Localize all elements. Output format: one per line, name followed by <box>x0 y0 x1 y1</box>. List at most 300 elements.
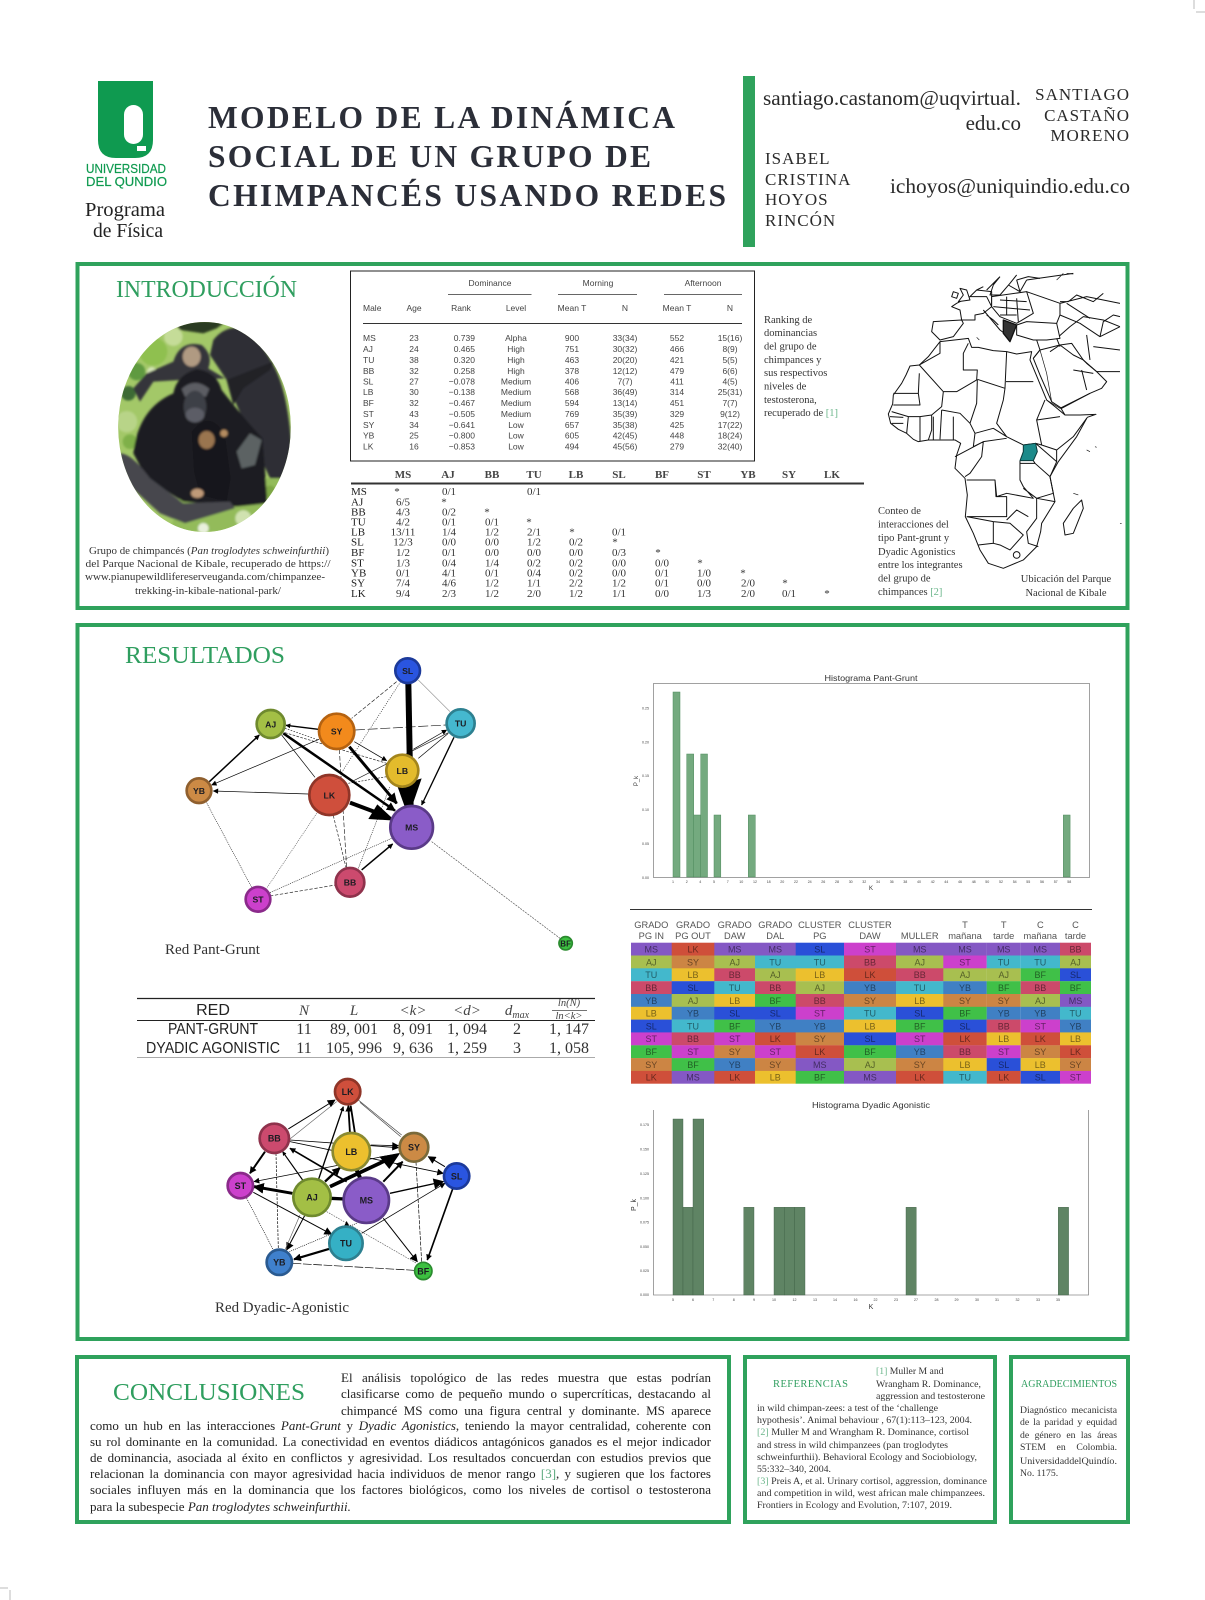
authors and emails: ichoyos@uniquindio.edu.co <box>890 174 1130 198</box>
table: ranking de dominancia y testosterona: 8(9) <box>722 344 738 354</box>
chart: histograma dyadic agonistic: 28 <box>934 1298 938 1302</box>
table: conteo de interacciones: 1/2 <box>396 547 410 559</box>
table: ranking de dominancia y testosterona: 425 <box>670 420 684 430</box>
map note: conteo de interacciones: del grupo de <box>878 574 931 584</box>
table: conteo de interacciones: 1/4 <box>442 526 457 538</box>
table: conteo de interacciones: 0/0 <box>612 568 627 580</box>
table: ranking de dominancia y testosterona: High <box>507 355 525 365</box>
column: T tarde: ST <box>998 1047 1010 1057</box>
column: T tarde: LK <box>998 1073 1009 1083</box>
table: ranking de dominancia y testosterona: 36(49) <box>613 387 637 397</box>
table: conteo de interacciones: 1/2 <box>485 526 499 538</box>
table note: ranking: dominancias <box>764 328 817 339</box>
chart: histograma dyadic agonistic: 16 <box>854 1298 858 1302</box>
network: red dyadic-agonistic: LB <box>345 1147 358 1157</box>
table: ranking de dominancia y testosterona: SL <box>363 376 374 386</box>
table: métricas de red: 89, 001 <box>330 1021 378 1038</box>
table: ranking de dominancia y testosterona: Age <box>406 303 422 313</box>
table: conteo de interacciones: * <box>569 526 575 538</box>
column: T tarde: SL <box>998 1060 1009 1070</box>
column: T mañana: YB <box>959 983 971 993</box>
column: grado PG in: LB <box>646 1009 657 1019</box>
table: ranking de dominancia y testosterona: 30 <box>409 387 419 397</box>
chart: histograma dyadic agonistic: 22 <box>874 1298 878 1302</box>
table header <box>634 920 1086 941</box>
table: conteo de interacciones: 4/2 <box>396 516 410 528</box>
table: conteo de interacciones: MS <box>351 486 367 498</box>
column: C tarde: BF <box>1070 983 1082 993</box>
text: referencias: [3] Preis A, et al. Urinary cortisol, aggression, dominance <box>757 1476 987 1487</box>
table: conteo de interacciones: BB <box>351 506 366 518</box>
column: T tarde: MS <box>997 944 1010 954</box>
column: cluster DAW <box>844 943 896 1084</box>
title <box>208 100 726 213</box>
table: conteo de interacciones: 1/2 <box>612 578 626 590</box>
table: ranking de dominancia y testosterona: 769 <box>565 409 579 419</box>
chart: histograma pant-grunt: 26 <box>821 880 825 884</box>
column: cluster DAW: LB <box>864 1021 876 1031</box>
chart: histograma dyadic agonistic: 9 <box>753 1298 755 1302</box>
column: grado DAL: TU <box>769 957 781 967</box>
table note: ranking: del grupo de <box>764 342 817 352</box>
column: Muller: LB <box>914 996 925 1006</box>
network: red pant-grunt: ST <box>252 895 264 905</box>
table: conteo de interacciones: 0/0 <box>697 578 712 590</box>
table: conteo de interacciones: 2/1 <box>527 526 541 538</box>
table: conteo de interacciones: 1/2 <box>485 578 499 590</box>
chart: histograma pant-grunt: 0.10 <box>642 808 649 812</box>
table: ranking de dominancia y testosterona: 24 <box>409 344 419 354</box>
table: ranking de dominancia y testosterona: 16 <box>409 442 419 452</box>
table: conteo de interacciones: 2/3 <box>442 588 457 600</box>
table: ranking de dominancia y testosterona: −0.467 <box>449 398 475 408</box>
network: red dyadic-agonistic: YB <box>273 1258 286 1268</box>
table header: DAW <box>859 931 881 941</box>
table: ranking de dominancia y testosterona: 463 <box>565 355 579 365</box>
logo: Universidad del Quindío: UNIVERSIDAD <box>86 162 166 176</box>
table: conteo de interacciones: 1/1 <box>527 578 541 590</box>
table: conteo de interacciones: * <box>394 486 400 498</box>
column: C mañana: YB <box>1034 1009 1046 1019</box>
table: métricas de red: 1, 259 <box>447 1040 487 1057</box>
chart: histograma pant-grunt: 48 <box>972 880 976 884</box>
column: C tarde: SY <box>1069 1060 1082 1070</box>
column: cluster DAW: TU <box>864 1009 876 1019</box>
text: referencias: aggression and testosterone <box>876 1391 985 1402</box>
column: grado DAW: YB <box>729 1060 741 1070</box>
chart: histograma dyadic agonistic: 13 <box>813 1298 817 1302</box>
chart: histograma pant-grunt: 20 <box>780 880 784 884</box>
chart: histograma pant-grunt: 44 <box>944 880 948 884</box>
table: ranking de dominancia y testosterona: 25 <box>409 430 419 440</box>
column: grado DAW: AJ <box>729 957 740 967</box>
logo: Universidad del Quindío: DEL QUNDIO <box>86 175 167 189</box>
chart: histograma dyadic agonistic: 8 <box>733 1298 735 1302</box>
table: métricas de red <box>137 998 595 1058</box>
table header: PG IN <box>639 931 664 941</box>
column: grado DAL: AJ <box>770 970 781 980</box>
column: Muller: SL <box>914 1009 925 1019</box>
table: ranking de dominancia y testosterona: 4(5) <box>722 376 738 386</box>
title: SOCIAL DE UN GRUPO DE <box>208 139 651 174</box>
column: cluster PG: BB <box>814 996 826 1006</box>
network: red pant-grunt: MS <box>405 823 418 833</box>
text: agradecimientos: UniversidaddelQuindío. <box>1020 1456 1117 1467</box>
table: métricas de red: 1, 058 <box>549 1040 589 1057</box>
table: conteo de interacciones: 2/0 <box>741 578 756 590</box>
column: grado PG in: TU <box>645 970 657 980</box>
chart: histograma dyadic agonistic: 0.000 <box>640 1293 649 1297</box>
column: grado PG in: SY <box>645 1060 657 1070</box>
column: cluster DAW: SY <box>864 996 876 1006</box>
table: ranking de dominancia y testosterona: Low <box>508 420 525 430</box>
chart: histograma pant-grunt: 7 <box>727 880 729 884</box>
table: ranking de dominancia y testosterona: Low <box>508 430 525 440</box>
table header: CLUSTER <box>848 920 892 930</box>
column: grado PG out: BB <box>687 1034 699 1044</box>
table header: MULLER <box>901 931 939 941</box>
table: métricas de red: d <box>505 1003 512 1019</box>
chart: histograma dyadic agonistic: 12 <box>792 1298 796 1302</box>
table: conteo de interacciones: 1/2 <box>569 588 583 600</box>
column: T tarde: LB <box>998 1034 1009 1044</box>
column: grado DAW: SY <box>729 1047 741 1057</box>
table: ranking de dominancia y testosterona: LK <box>363 442 374 452</box>
chart: histograma pant-grunt: 2 <box>686 880 688 884</box>
table: conteo de interacciones: AJ <box>441 469 455 481</box>
column: Muller: TU <box>914 983 926 993</box>
chart: histograma pant-grunt: 0.15 <box>642 774 649 778</box>
chart: histograma pant-grunt: Histograma Pant-Grunt <box>824 673 918 683</box>
table: métricas de red: max <box>512 1010 530 1021</box>
table: conteo de interacciones: 2/0 <box>741 588 756 600</box>
table: conteo de interacciones: 0/2 <box>569 558 583 570</box>
table: ranking de dominancia y testosterona: 605 <box>565 430 579 440</box>
table: ranking de dominancia y testosterona: 406 <box>565 376 579 386</box>
column: T mañana: MS <box>958 944 972 954</box>
table: conteo de interacciones: 0/0 <box>612 558 627 570</box>
chart: histograma pant-grunt: 57 <box>1054 880 1058 884</box>
table: ranking de dominancia y testosterona: 421 <box>670 355 684 365</box>
chart: histograma pant-grunt: 56 <box>1040 880 1044 884</box>
column: T mañana: SL <box>959 1021 971 1031</box>
table: métricas de red: ln(N) <box>558 998 581 1009</box>
table note: ranking: recuperado de [1] <box>764 408 838 419</box>
column: cluster PG: LB <box>814 970 825 980</box>
heading: referencias: REFERENCIAS <box>773 1379 848 1390</box>
table header: T <box>1001 920 1007 930</box>
caption: red dyadic-agonistic: Red Dyadic-Agonistic <box>215 1300 349 1316</box>
column: T tarde: YB <box>998 1009 1010 1019</box>
chart: histograma dyadic agonistic: K <box>869 1304 874 1311</box>
chart: histograma dyadic agonistic: 33 <box>1036 1298 1040 1302</box>
chart: histograma pant-grunt: 40 <box>917 880 921 884</box>
table: métricas de red: <d> <box>453 1003 481 1019</box>
column: Muller: BB <box>914 970 926 980</box>
chart: histograma pant-grunt: 1 <box>672 880 674 884</box>
table header: GRADO <box>676 920 710 930</box>
network: red pant-grunt <box>187 658 572 950</box>
column: grado PG in: AJ <box>646 957 657 967</box>
table: ranking de dominancia y testosterona: 32 <box>409 366 419 376</box>
table: ranking de dominancia y testosterona: 900 <box>565 333 579 343</box>
photo: chimpancés <box>116 320 293 534</box>
table: métricas de red: PANT-GRUNT <box>168 1021 258 1038</box>
network: red dyadic-agonistic: LK <box>342 1087 354 1097</box>
table: conteo de interacciones: BF <box>655 469 669 481</box>
map caption: ubicación: Ubicación del Parque <box>1021 574 1112 585</box>
table: conteo de interacciones: 0/1 <box>782 588 796 600</box>
column: cluster PG: YB <box>814 1021 826 1031</box>
column: grado PG out: ST <box>687 1047 699 1057</box>
network: red dyadic-agonistic: TU <box>340 1239 352 1249</box>
column: T mañana: SY <box>959 996 971 1006</box>
table: ranking de dominancia y testosterona: High <box>507 344 525 354</box>
column: cluster DAW: AJ <box>865 1060 875 1070</box>
column: grado PG out <box>672 943 715 1084</box>
map note: conteo de interacciones: tipo Pant-grunt y <box>878 533 950 544</box>
table: ranking de dominancia y testosterona: 42(45) <box>613 430 637 440</box>
table: ranking de dominancia y testosterona: BB <box>363 366 375 376</box>
table: conteo de interacciones: 0/2 <box>569 568 583 580</box>
network: red pant-grunt: SY <box>331 727 343 737</box>
table header: C <box>1072 920 1079 930</box>
column: cluster PG <box>796 943 844 1084</box>
table: conteo de interacciones: * <box>655 547 661 559</box>
table: conteo de interacciones: 1/0 <box>697 568 712 580</box>
column: Muller: SY <box>914 1060 926 1070</box>
column: T mañana: TU <box>959 1073 971 1083</box>
column: C tarde: MS <box>1069 996 1082 1006</box>
text: conclusiones: sociales influyen más en la dominancia que los factores biológicos, como los niveles de cortisol o testosterona <box>90 1482 711 1497</box>
table: ranking de dominancia y testosterona: Medium <box>501 409 531 419</box>
column: grado PG in: YB <box>645 996 657 1006</box>
text: referencias: and competition in wild, west african male chimpanzees. <box>757 1488 985 1499</box>
table: conteo de interacciones: * <box>824 588 830 600</box>
network: red pant-grunt: LB <box>397 766 408 776</box>
map: África con Uganda resaltada <box>888 273 1122 568</box>
title: CHIMPANCÉS USANDO REDES <box>208 178 726 213</box>
map caption: ubicación: Nacional de Kibale <box>1025 588 1107 599</box>
text: conclusiones: relacionan la dominancia con mayor agresividad hacia individuos de menor rango [3], y sugieren que los factores <box>90 1466 711 1481</box>
table: ranking de dominancia y testosterona: −0.641 <box>449 420 475 430</box>
column: grado DAW: BF <box>729 1021 741 1031</box>
panel: introducción <box>78 264 1128 608</box>
authors and emails: SANTIAGO <box>1035 85 1130 104</box>
chart: histograma pant-grunt: 42 <box>931 880 935 884</box>
table: ranking de dominancia y testosterona: Afternoon <box>685 278 722 288</box>
table: conteo de interacciones: 0/0 <box>655 588 670 600</box>
table: ranking de dominancia y testosterona: Medium <box>501 376 531 386</box>
chart: histograma dyadic agonistic: 35 <box>1056 1298 1060 1302</box>
table: ranking de dominancia y testosterona: 15(16) <box>718 333 742 343</box>
chart: histograma dyadic agonistic: 32 <box>1016 1298 1020 1302</box>
column: grado DAW: BB <box>729 970 741 980</box>
table: rankings por métrica <box>630 910 1092 1084</box>
table note: ranking <box>764 315 838 419</box>
column: C tarde: TU <box>1070 1009 1082 1019</box>
column: C mañana: SY <box>1034 1047 1046 1057</box>
column: C mañana: BF <box>1035 970 1047 980</box>
map note: conteo de interacciones <box>878 506 963 598</box>
table: conteo de interacciones: 0/1 <box>442 486 456 498</box>
column: grado PG out: SL <box>687 983 699 993</box>
table: ranking de dominancia y testosterona: Mean T <box>558 303 586 313</box>
table: conteo de interacciones: LB <box>569 469 584 481</box>
column: Muller: ST <box>914 1034 926 1044</box>
table: ranking de dominancia y testosterona: 279 <box>670 442 684 452</box>
column: T mañana: LK <box>959 1034 971 1044</box>
table: conteo de interacciones: 1/2 <box>527 536 541 548</box>
table header: CLUSTER <box>798 920 842 930</box>
column: cluster DAW: BF <box>864 1047 876 1057</box>
column: cluster DAW: BB <box>864 957 876 967</box>
table: ranking de dominancia y testosterona: 45(56) <box>613 442 637 452</box>
table: conteo de interacciones: * <box>526 516 532 528</box>
column: C mañana: TU <box>1034 957 1046 967</box>
chart: histograma dyadic agonistic: 0.075 <box>640 1220 649 1224</box>
panel: conclusiones <box>77 1357 729 1522</box>
table: conteo de interacciones: 1/4 <box>485 558 500 570</box>
text: agradecimientos: de la paridad y equidad <box>1020 1417 1117 1428</box>
table: conteo de interacciones: * <box>484 506 490 518</box>
column: grado DAW: LB <box>729 996 740 1006</box>
table: conteo de interacciones: SY <box>782 469 796 481</box>
table: conteo de interacciones: 2/2 <box>569 578 583 590</box>
network: red pant-grunt: AJ <box>265 719 276 729</box>
column: T tarde: AJ <box>998 970 1009 980</box>
column: C tarde <box>1060 943 1091 1084</box>
table: ranking de dominancia y testosterona: 552 <box>670 333 684 343</box>
table: conteo de interacciones: LK <box>351 588 366 600</box>
chart: histograma pant-grunt: 0.05 <box>642 842 649 846</box>
chart: histograma dyadic agonistic: 0.150 <box>640 1148 649 1152</box>
table: ranking de dominancia y testosterona: 13(14) <box>613 398 637 408</box>
table: ranking de dominancia y testosterona: 32(40) <box>718 442 742 452</box>
column: grado DAL: LB <box>770 1073 781 1083</box>
column: grado PG out: LK <box>687 944 699 954</box>
chart: histograma pant-grunt: 32 <box>862 880 866 884</box>
heading: resultados: RESULTADOS <box>125 643 285 669</box>
table: ranking de dominancia y testosterona: SY <box>363 420 375 430</box>
column: grado PG out: AJ <box>688 996 698 1006</box>
table header: C <box>1037 920 1044 930</box>
table: conteo de interacciones: YB <box>740 469 756 481</box>
table: ranking de dominancia y testosterona: 0.465 <box>454 344 475 354</box>
chart: histograma pant-grunt: 22 <box>794 880 798 884</box>
table: ranking de dominancia y testosterona: 38 <box>409 355 419 365</box>
column: C tarde: ST <box>1070 1073 1082 1083</box>
text: programa de física <box>85 199 165 242</box>
network: red dyadic-agonistic: BB <box>268 1134 281 1144</box>
text: agradecimientos: No. 1175. <box>1020 1468 1058 1479</box>
table: conteo de interacciones: * <box>612 536 618 548</box>
table: conteo de interacciones: 9/4 <box>396 588 411 600</box>
table: ranking de dominancia y testosterona: −0.853 <box>449 442 475 452</box>
table: ranking de dominancia y testosterona: 657 <box>565 420 579 430</box>
table: ranking de dominancia y testosterona: 27 <box>409 376 419 386</box>
chart: histograma pant-grunt: 10 <box>739 880 743 884</box>
column: T mañana <box>943 943 987 1084</box>
table: ranking de dominancia y testosterona: Low <box>508 442 525 452</box>
table: conteo de interacciones: 0/2 <box>569 536 583 548</box>
chart: histograma dyadic agonistic: 14 <box>833 1298 837 1302</box>
map note: conteo de interacciones: chimpances [2] <box>878 587 942 598</box>
table: ranking de dominancia y testosterona: 0.739 <box>454 333 475 343</box>
table: conteo de interacciones: 1/1 <box>612 588 626 600</box>
column: Muller: AJ <box>914 957 925 967</box>
network: red pant-grunt: BB <box>344 878 356 888</box>
authors and emails <box>763 85 1130 230</box>
column: C tarde: SL <box>1070 970 1081 980</box>
column: Muller: BF <box>914 1021 926 1031</box>
table: conteo de interacciones: * <box>697 558 703 570</box>
table: ranking de dominancia y testosterona <box>350 271 754 461</box>
table header: GRADO <box>634 920 668 930</box>
table: conteo de interacciones: 0/1 <box>485 516 499 528</box>
table: ranking de dominancia y testosterona: 7(7) <box>617 376 633 386</box>
table: conteo de interacciones: SL <box>351 536 364 548</box>
chart: histograma dyadic agonistic: 27 <box>914 1298 918 1302</box>
table: ranking de dominancia y testosterona: 594 <box>565 398 579 408</box>
text: programa de física: de Física <box>93 220 163 242</box>
table header: PG <box>813 931 827 941</box>
column: grado DAW: LK <box>729 1073 740 1083</box>
chart: histograma pant-grunt: 46 <box>958 880 962 884</box>
table note: ranking: niveles de <box>764 382 807 392</box>
table: conteo de interacciones: 0/3 <box>612 547 627 559</box>
network: red dyadic-agonistic: SL <box>451 1171 463 1181</box>
table: ranking de dominancia y testosterona: 33(34) <box>613 333 637 343</box>
column: grado DAL: BF <box>770 996 782 1006</box>
table: conteo de interacciones: 6/5 <box>396 496 411 508</box>
table: conteo de interacciones: 0/0 <box>485 547 500 559</box>
network: red dyadic-agonistic: MS <box>360 1196 373 1206</box>
chart: histograma dyadic agonistic: 6 <box>692 1298 694 1302</box>
table note: ranking: Ranking de <box>764 315 812 326</box>
column: grado DAW: SL <box>729 1009 740 1019</box>
table: ranking de dominancia y testosterona: 35(38) <box>613 420 637 430</box>
table: ranking de dominancia y testosterona: 25(31) <box>718 387 742 397</box>
column: Muller <box>896 943 944 1084</box>
text: agradecimientos: de género en las áreas <box>1020 1430 1117 1441</box>
logo: Universidad del Quindío <box>86 81 167 189</box>
table: conteo de interacciones: ST <box>351 558 364 570</box>
table: conteo de interacciones: 0/0 <box>655 558 670 570</box>
column: grado PG out: MS <box>686 1073 700 1083</box>
network: red pant-grunt: YB <box>193 786 205 796</box>
text: referencias: [2] Muller M and Wrangham R. Dominance, cortisol <box>757 1427 969 1438</box>
table header: DAW <box>724 931 746 941</box>
table: conteo de interacciones: AJ <box>351 496 364 508</box>
table: ranking de dominancia y testosterona: Rank <box>451 303 472 313</box>
chart: histograma pant-grunt: 18 <box>767 880 771 884</box>
table: conteo de interacciones: 0/1 <box>655 568 669 580</box>
column: grado DAW <box>714 943 755 1084</box>
table: ranking de dominancia y testosterona: Medium <box>501 387 531 397</box>
text: agradecimientos <box>1020 1405 1117 1479</box>
column: grado PG in: LK <box>646 1073 657 1083</box>
table: conteo de interacciones: MS <box>395 469 411 481</box>
chart: histograma dyadic agonistic: 10 <box>772 1298 776 1302</box>
chart: histograma dyadic agonistic: 7 <box>712 1298 714 1302</box>
column: grado DAL <box>755 943 796 1084</box>
authors and emails: CASTAÑO <box>1044 106 1130 125</box>
column: cluster DAW: ST <box>864 944 876 954</box>
chart: histograma pant-grunt: 0.25 <box>642 706 649 710</box>
table: ranking de dominancia y testosterona: 32 <box>409 398 419 408</box>
table: ranking de dominancia y testosterona: 0.258 <box>454 366 475 376</box>
